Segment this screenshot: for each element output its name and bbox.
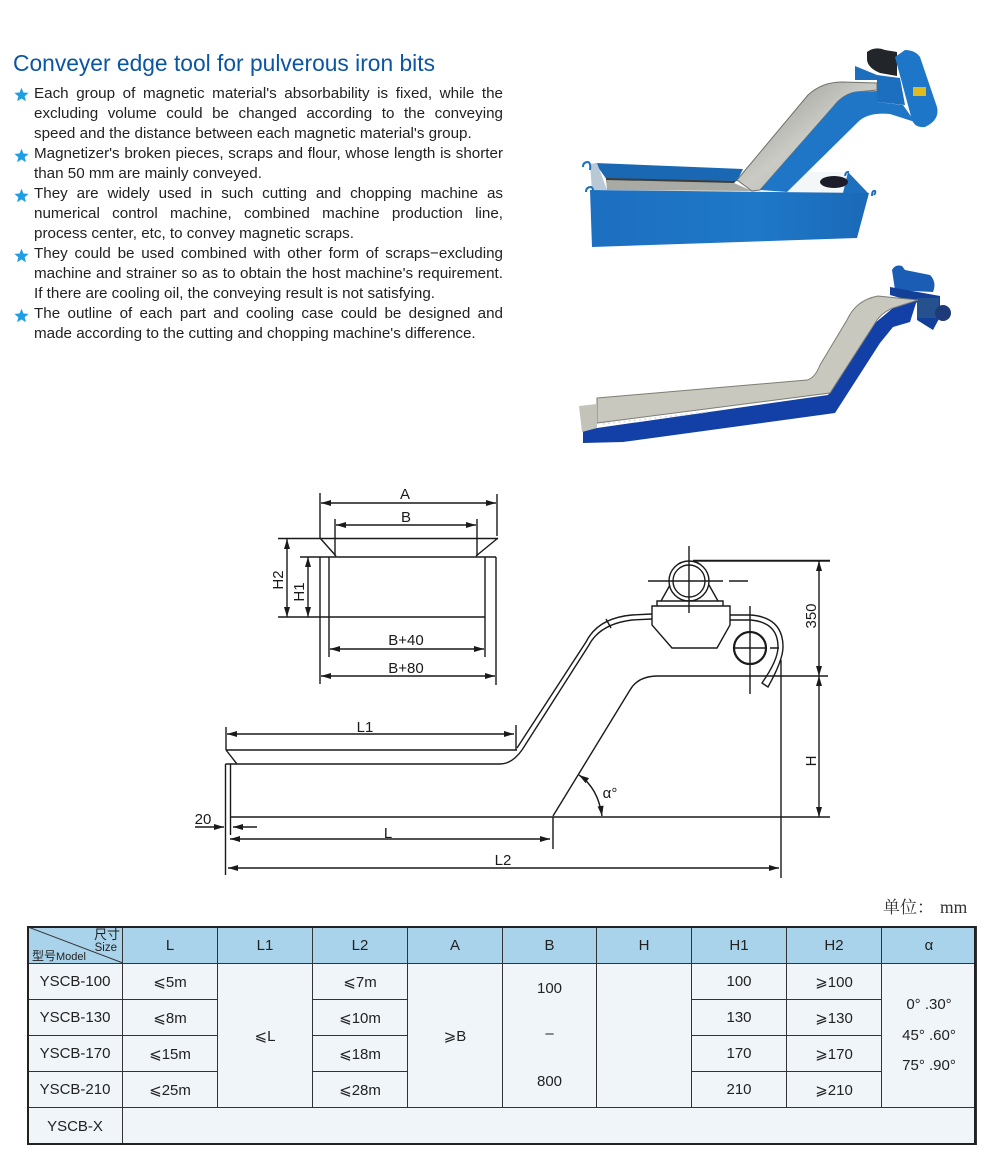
specification table: 45° .60° bbox=[902, 1027, 956, 1044]
table outer border bbox=[27, 926, 976, 1145]
warning label bbox=[913, 87, 926, 96]
dimension L2: L2 bbox=[495, 852, 511, 869]
specification table: 100 bbox=[726, 973, 752, 990]
title: Conveyer edge tool for pulverous iron bits bbox=[13, 50, 435, 76]
dimension B+80: B+80 bbox=[388, 660, 424, 677]
motor bbox=[867, 48, 897, 76]
dimension H: H bbox=[803, 756, 820, 766]
specification table: ⩾100 bbox=[815, 974, 853, 990]
top reference line bbox=[693, 560, 830, 562]
conveyor incline bbox=[517, 614, 652, 750]
specification table: 75° .90° bbox=[902, 1057, 956, 1074]
drive head bbox=[855, 66, 905, 105]
bullet text 2 bbox=[34, 145, 503, 182]
icon: star bullet 3 bbox=[14, 188, 28, 202]
specification table: 100 bbox=[537, 980, 562, 997]
specification table: B bbox=[544, 936, 554, 954]
bullet text 3: They are widely used in such cutting and chopping machine as bbox=[34, 185, 503, 202]
dimension B: B bbox=[401, 509, 411, 526]
head curve bbox=[730, 615, 783, 687]
specification table: YSCB-210 bbox=[40, 1081, 110, 1098]
dimension 20 bbox=[195, 811, 257, 828]
drive head bbox=[890, 287, 940, 330]
specification table: A bbox=[450, 936, 460, 954]
icon: star bullet 2 bbox=[14, 148, 28, 162]
perforation strip bbox=[603, 412, 707, 424]
unit label: 单位： mm bbox=[883, 897, 967, 917]
steel belt bbox=[597, 296, 918, 423]
drive circle bbox=[648, 546, 748, 613]
specification table: – bbox=[545, 1025, 554, 1042]
specification table: ⩾170 bbox=[815, 1046, 853, 1062]
dimension H2 bbox=[270, 539, 287, 617]
specification table: YSCB-130 bbox=[40, 1009, 110, 1026]
diagram: cross section bbox=[270, 486, 498, 685]
section outlines bbox=[278, 493, 498, 685]
specification table: YSCB-170 bbox=[40, 1045, 110, 1062]
return wheel bbox=[734, 606, 779, 694]
end wheel bbox=[935, 305, 951, 321]
specification table: 0° .30° bbox=[906, 996, 952, 1013]
dimension L: L bbox=[384, 825, 392, 842]
blue support bbox=[760, 91, 915, 192]
specification table: H1 bbox=[729, 936, 749, 954]
specification table: ⩽18m bbox=[339, 1046, 381, 1062]
specification table: H2 bbox=[824, 936, 844, 954]
angle alpha: α° bbox=[603, 785, 617, 802]
bullet text 4: They could be used combined with other form of scraps−excluding bbox=[34, 245, 503, 262]
bullet text 2: than 50 mm are mainly conveyed. bbox=[34, 165, 262, 182]
steel incline bbox=[737, 82, 877, 191]
specification table: ⩽8m bbox=[153, 1010, 187, 1026]
tank right interior bbox=[843, 172, 868, 193]
specification table: 210 bbox=[726, 1081, 752, 1098]
icon: star bullet 1 bbox=[14, 88, 28, 102]
specification table: ⩽10m bbox=[339, 1010, 381, 1026]
bullet text 1: excluding volume could be changed according to the conveying bbox=[34, 105, 503, 122]
drive cover bbox=[895, 50, 938, 127]
diagram: side elevation bbox=[195, 546, 830, 878]
dimension 20: 20 bbox=[195, 811, 211, 828]
tank hole bbox=[820, 176, 848, 188]
drawings and photos canvas bbox=[195, 48, 951, 878]
specification table: 170 bbox=[726, 1045, 752, 1062]
specification table: Size bbox=[95, 942, 117, 954]
lower frame incline bbox=[553, 676, 828, 816]
specification table: ⩽15m bbox=[149, 1046, 191, 1062]
trough and frame bbox=[226, 660, 830, 878]
specification table bbox=[29, 926, 977, 1145]
specification table: ⩽5m bbox=[153, 974, 187, 990]
specification table: 130 bbox=[726, 1009, 752, 1026]
tank hooks bbox=[583, 162, 875, 196]
specification table: YSCB-X bbox=[47, 1118, 103, 1134]
bullet text 3 bbox=[34, 185, 503, 242]
icon: star bullet 4 bbox=[14, 248, 28, 262]
bullet text 1 bbox=[34, 85, 503, 142]
drive box bbox=[652, 585, 730, 648]
angle alpha bbox=[579, 775, 617, 816]
bullet text 3: numerical control machine, combined machine production line, bbox=[34, 205, 503, 222]
steel floor bbox=[606, 180, 752, 191]
specification table: ⩾130 bbox=[815, 1010, 853, 1026]
dimension 350: 350 bbox=[803, 603, 820, 629]
specification table: 800 bbox=[537, 1073, 562, 1090]
photo: conveyor with tank bbox=[583, 48, 938, 247]
specification table: ⩾210 bbox=[815, 1082, 853, 1098]
end plate bbox=[579, 404, 597, 432]
dimension H2: H2 bbox=[270, 570, 287, 590]
bullet text 5 bbox=[34, 305, 503, 342]
specification table: α bbox=[925, 936, 933, 954]
dimension H1 bbox=[291, 557, 308, 617]
specification table: L1 bbox=[257, 936, 273, 954]
specification table: ⩽L bbox=[255, 1028, 275, 1044]
specification table: ⩽28m bbox=[339, 1082, 381, 1098]
specification table: 型号Model bbox=[32, 949, 86, 963]
specification table: L bbox=[166, 936, 174, 954]
specification table: H bbox=[639, 936, 649, 954]
feature list bbox=[14, 85, 503, 342]
dimension B bbox=[336, 509, 476, 526]
icon: star bullet 5 bbox=[14, 308, 28, 322]
tank back panel bbox=[595, 163, 743, 181]
motor bbox=[892, 266, 934, 292]
open tank area bbox=[787, 172, 868, 193]
bullet text 1: Each group of magnetic material's absorbability is fixed, while the bbox=[34, 85, 503, 102]
specification table: ⩾B bbox=[444, 1028, 466, 1044]
dimension L1: L1 bbox=[357, 719, 373, 736]
bullet text 5: The outline of each part and cooling case could be designed and bbox=[34, 305, 503, 322]
dimension B+40: B+40 bbox=[388, 632, 424, 649]
specification table: ⩽7m bbox=[343, 974, 377, 990]
bullet text 2: Magnetizer's broken pieces, scraps and flour, whose length is shorter bbox=[34, 145, 503, 162]
dimension A: A bbox=[400, 486, 410, 503]
specification table: L2 bbox=[352, 936, 368, 954]
bullet text 4: machine and strainer so as to obtain the host machine's requirement. bbox=[34, 265, 503, 282]
bullet text 1: speed and the distance between each magnetic material's group. bbox=[34, 125, 472, 142]
tank front bbox=[590, 190, 869, 247]
bullet text 3: process center, etc, to convey magnetic scraps. bbox=[34, 225, 354, 242]
tank left side bbox=[590, 163, 607, 190]
control panel bbox=[917, 298, 939, 318]
dimension 350 bbox=[803, 561, 820, 676]
dark belt gap bbox=[606, 178, 736, 184]
bullet text 4 bbox=[34, 245, 503, 302]
photo: conveyor without tank bbox=[579, 266, 951, 443]
bullet text 5: made according to the cutting and chopping machine's difference. bbox=[34, 325, 476, 342]
specification table: 尺寸 bbox=[94, 927, 120, 942]
specification table: ⩽25m bbox=[149, 1082, 191, 1098]
dimension H1: H1 bbox=[291, 582, 308, 602]
bullet text 4: If there are cooling oil, the conveying result is not satisfying. bbox=[34, 285, 435, 302]
blue frame bbox=[583, 300, 917, 443]
specification table: YSCB-100 bbox=[40, 973, 110, 990]
